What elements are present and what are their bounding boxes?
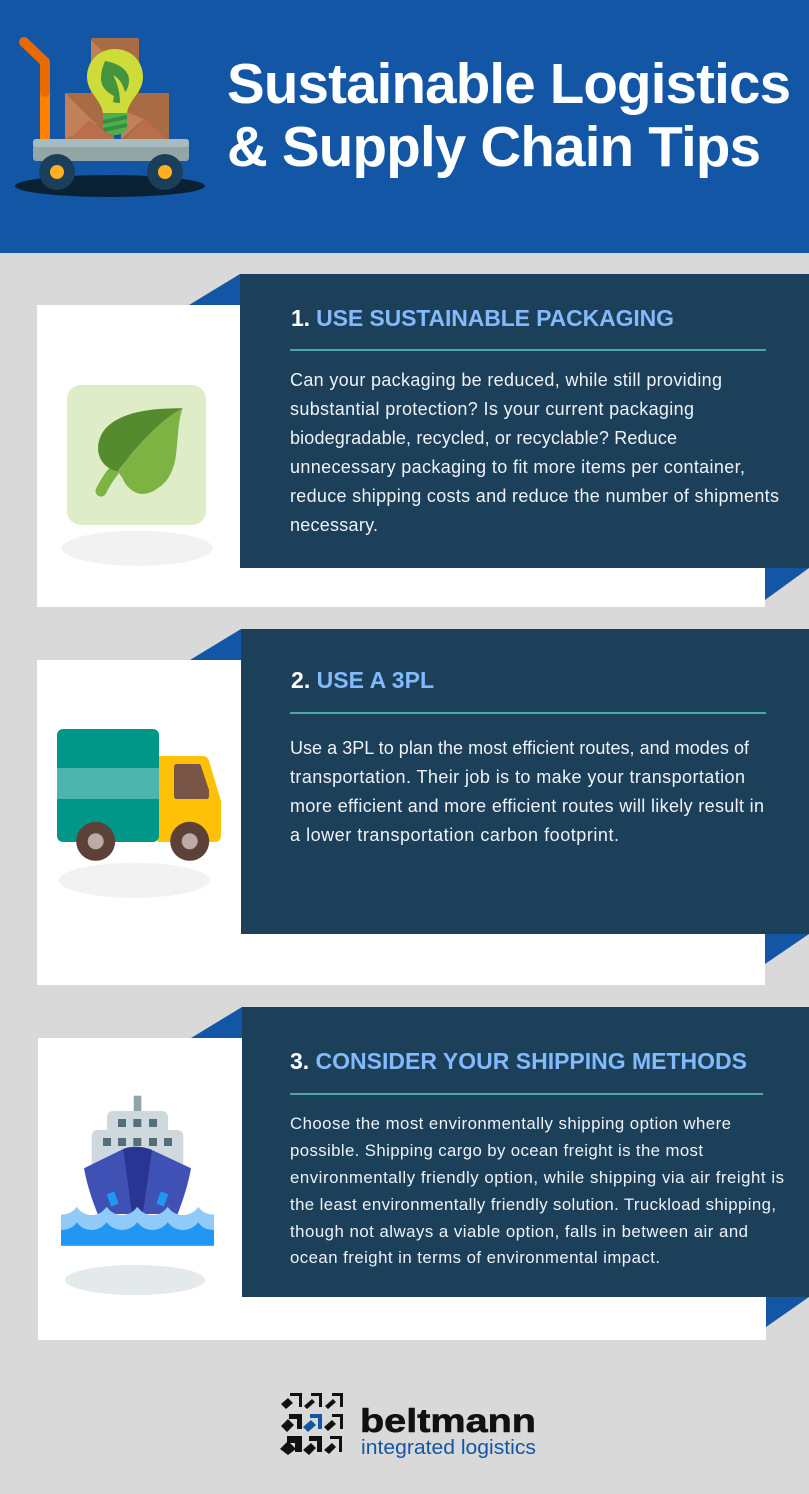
text block: shipping tip: Choose the most environmentally shipping option where [290, 1114, 731, 1133]
text block: packaging tip: unnecessary packaging to fit more items per container, [290, 457, 745, 477]
heading: use a 3PL: 2. USE A 3PL [291, 667, 434, 693]
text block: packaging tip: substantial protection? Is your current packaging [290, 399, 694, 419]
text block: packaging tip: Can your packaging be reduced, while still providing [290, 370, 722, 390]
title [227, 52, 791, 178]
title: Sustainable Logistics [227, 52, 791, 115]
text block: shipping tip: ocean freight in terms of environmental impact. [290, 1248, 660, 1267]
text block: 3PL tip [290, 738, 764, 845]
text block: 3PL tip: Use a 3PL to plan the most efficient routes, and modes of [290, 738, 750, 758]
icon: truck [57, 729, 221, 898]
logo wordmark [360, 1402, 536, 1459]
text block: shipping tip: environmentally friendly option, while shipping via air freight is [290, 1168, 784, 1187]
text block: shipping tip [290, 1114, 784, 1267]
text block: 3PL tip: a lower transportation carbon footprint. [290, 825, 619, 845]
text block: packaging tip: necessary. [290, 515, 378, 535]
beltmann logo [280, 1393, 536, 1459]
text block: shipping tip: though not always a viable option, falls in between air and [290, 1222, 748, 1241]
panel: sustainable packaging [37, 274, 809, 607]
text block: shipping tip: possible. Shipping cargo by ocean freight is the most [290, 1141, 703, 1160]
heading: consider your shipping methods: 3. CONSIDER YOUR SHIPPING METHODS [290, 1048, 747, 1074]
icon: cargo ship [61, 1096, 214, 1295]
logo wordmark: integrated logistics [361, 1437, 536, 1459]
heading: use sustainable packaging: 1. USE SUSTAINABLE PACKAGING [291, 305, 674, 331]
text block: shipping tip: the least environmentally friendly solution. Truckload shipping, [290, 1195, 776, 1214]
header banner [0, 0, 809, 253]
text block: packaging tip: biodegradable, recycled, or recyclable? Reduce [290, 428, 677, 448]
text block: 3PL tip: transportation. Their job is to make your transportation [290, 767, 745, 787]
panel: use a 3PL [37, 629, 809, 985]
logo wordmark: beltmann [360, 1402, 536, 1439]
icon: leaf [62, 385, 213, 566]
title: & Supply Chain Tips [227, 115, 761, 178]
text block: packaging tip: reduce shipping costs and reduce the number of shipments [290, 486, 779, 506]
icon: cart with boxes and light bulb [15, 38, 205, 197]
panel: shipping methods [38, 1007, 809, 1340]
text block: 3PL tip: more efficient and more efficient routes will likely result in [290, 796, 764, 816]
icon: arrow grid [280, 1393, 343, 1455]
text block: packaging tip [290, 370, 779, 535]
